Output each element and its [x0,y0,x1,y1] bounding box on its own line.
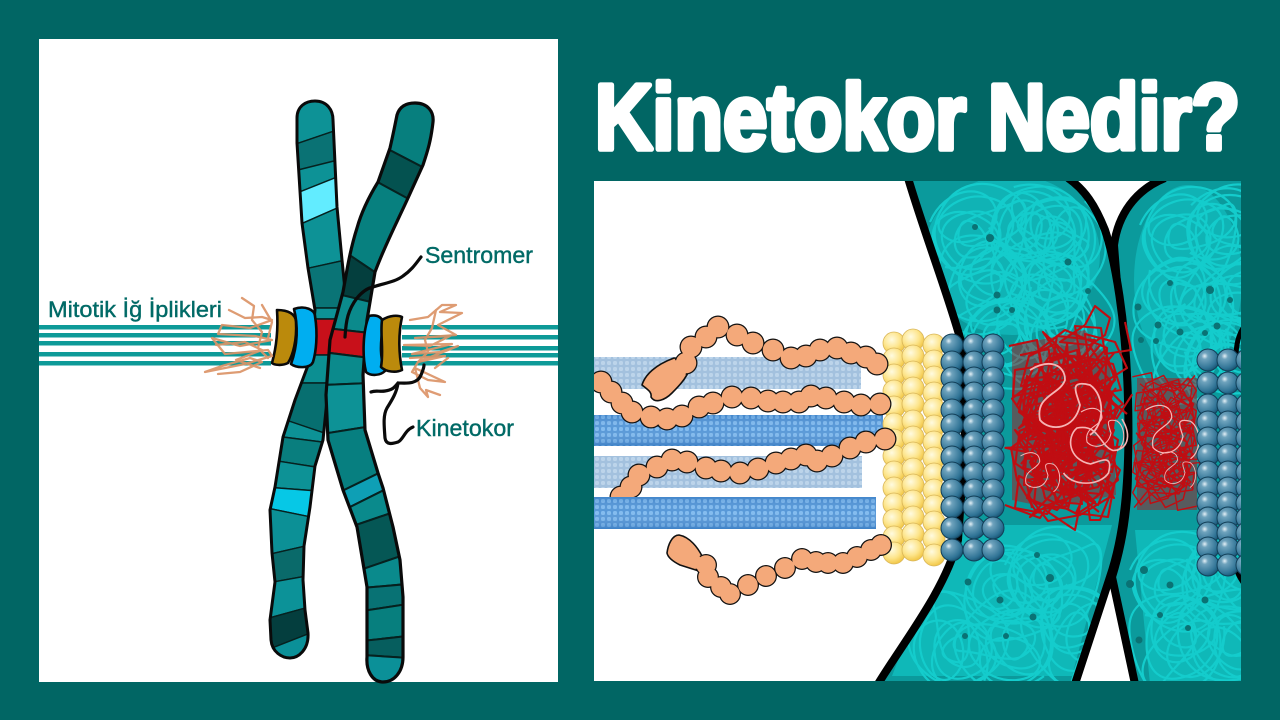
spindle fibres: right [402,325,558,366]
microtubule 2 [594,415,883,446]
chromatid close-up: left [875,181,1132,681]
protein chain 4 [667,535,881,594]
chromatid outer edge fragments [1234,326,1241,584]
blue protein columns: right [1196,348,1241,576]
panel: kinetochore close-up [594,181,1241,681]
microtubule 1 [594,357,861,389]
label: Mitotik İğ İplikleri: Mitotik İğ İplikleri [48,297,222,322]
microtubule 4 [594,497,876,529]
spindle fibres: left [39,325,271,366]
spindle fibre tangles: left [205,298,272,374]
panel: chromosome diagram [39,39,558,690]
chromatid close-up: right [1110,181,1241,681]
protein chain 3 [621,439,885,497]
red chromatin: left [996,306,1136,530]
red chromatin: right [1132,372,1200,511]
kinetochore plates: right [364,315,402,375]
chromatid: right [320,95,440,690]
kinetochore plates: left [272,308,316,367]
chromatid: left [268,100,345,660]
leader line: Sentromer [345,257,421,337]
yellow protein column [883,329,945,566]
blue protein columns: left [941,334,1004,561]
spindle fibre tangles: right [404,305,462,397]
microtubule 3 [594,456,862,488]
chromatin gaps: dark dots [962,224,1233,644]
label: Kinetokor: Kinetokor [416,415,514,441]
label: Sentromer: Sentromer [425,242,533,268]
protein chain 1 [642,327,877,401]
protein chain 2 [601,382,880,419]
leader line: Kinetokor [371,365,424,443]
